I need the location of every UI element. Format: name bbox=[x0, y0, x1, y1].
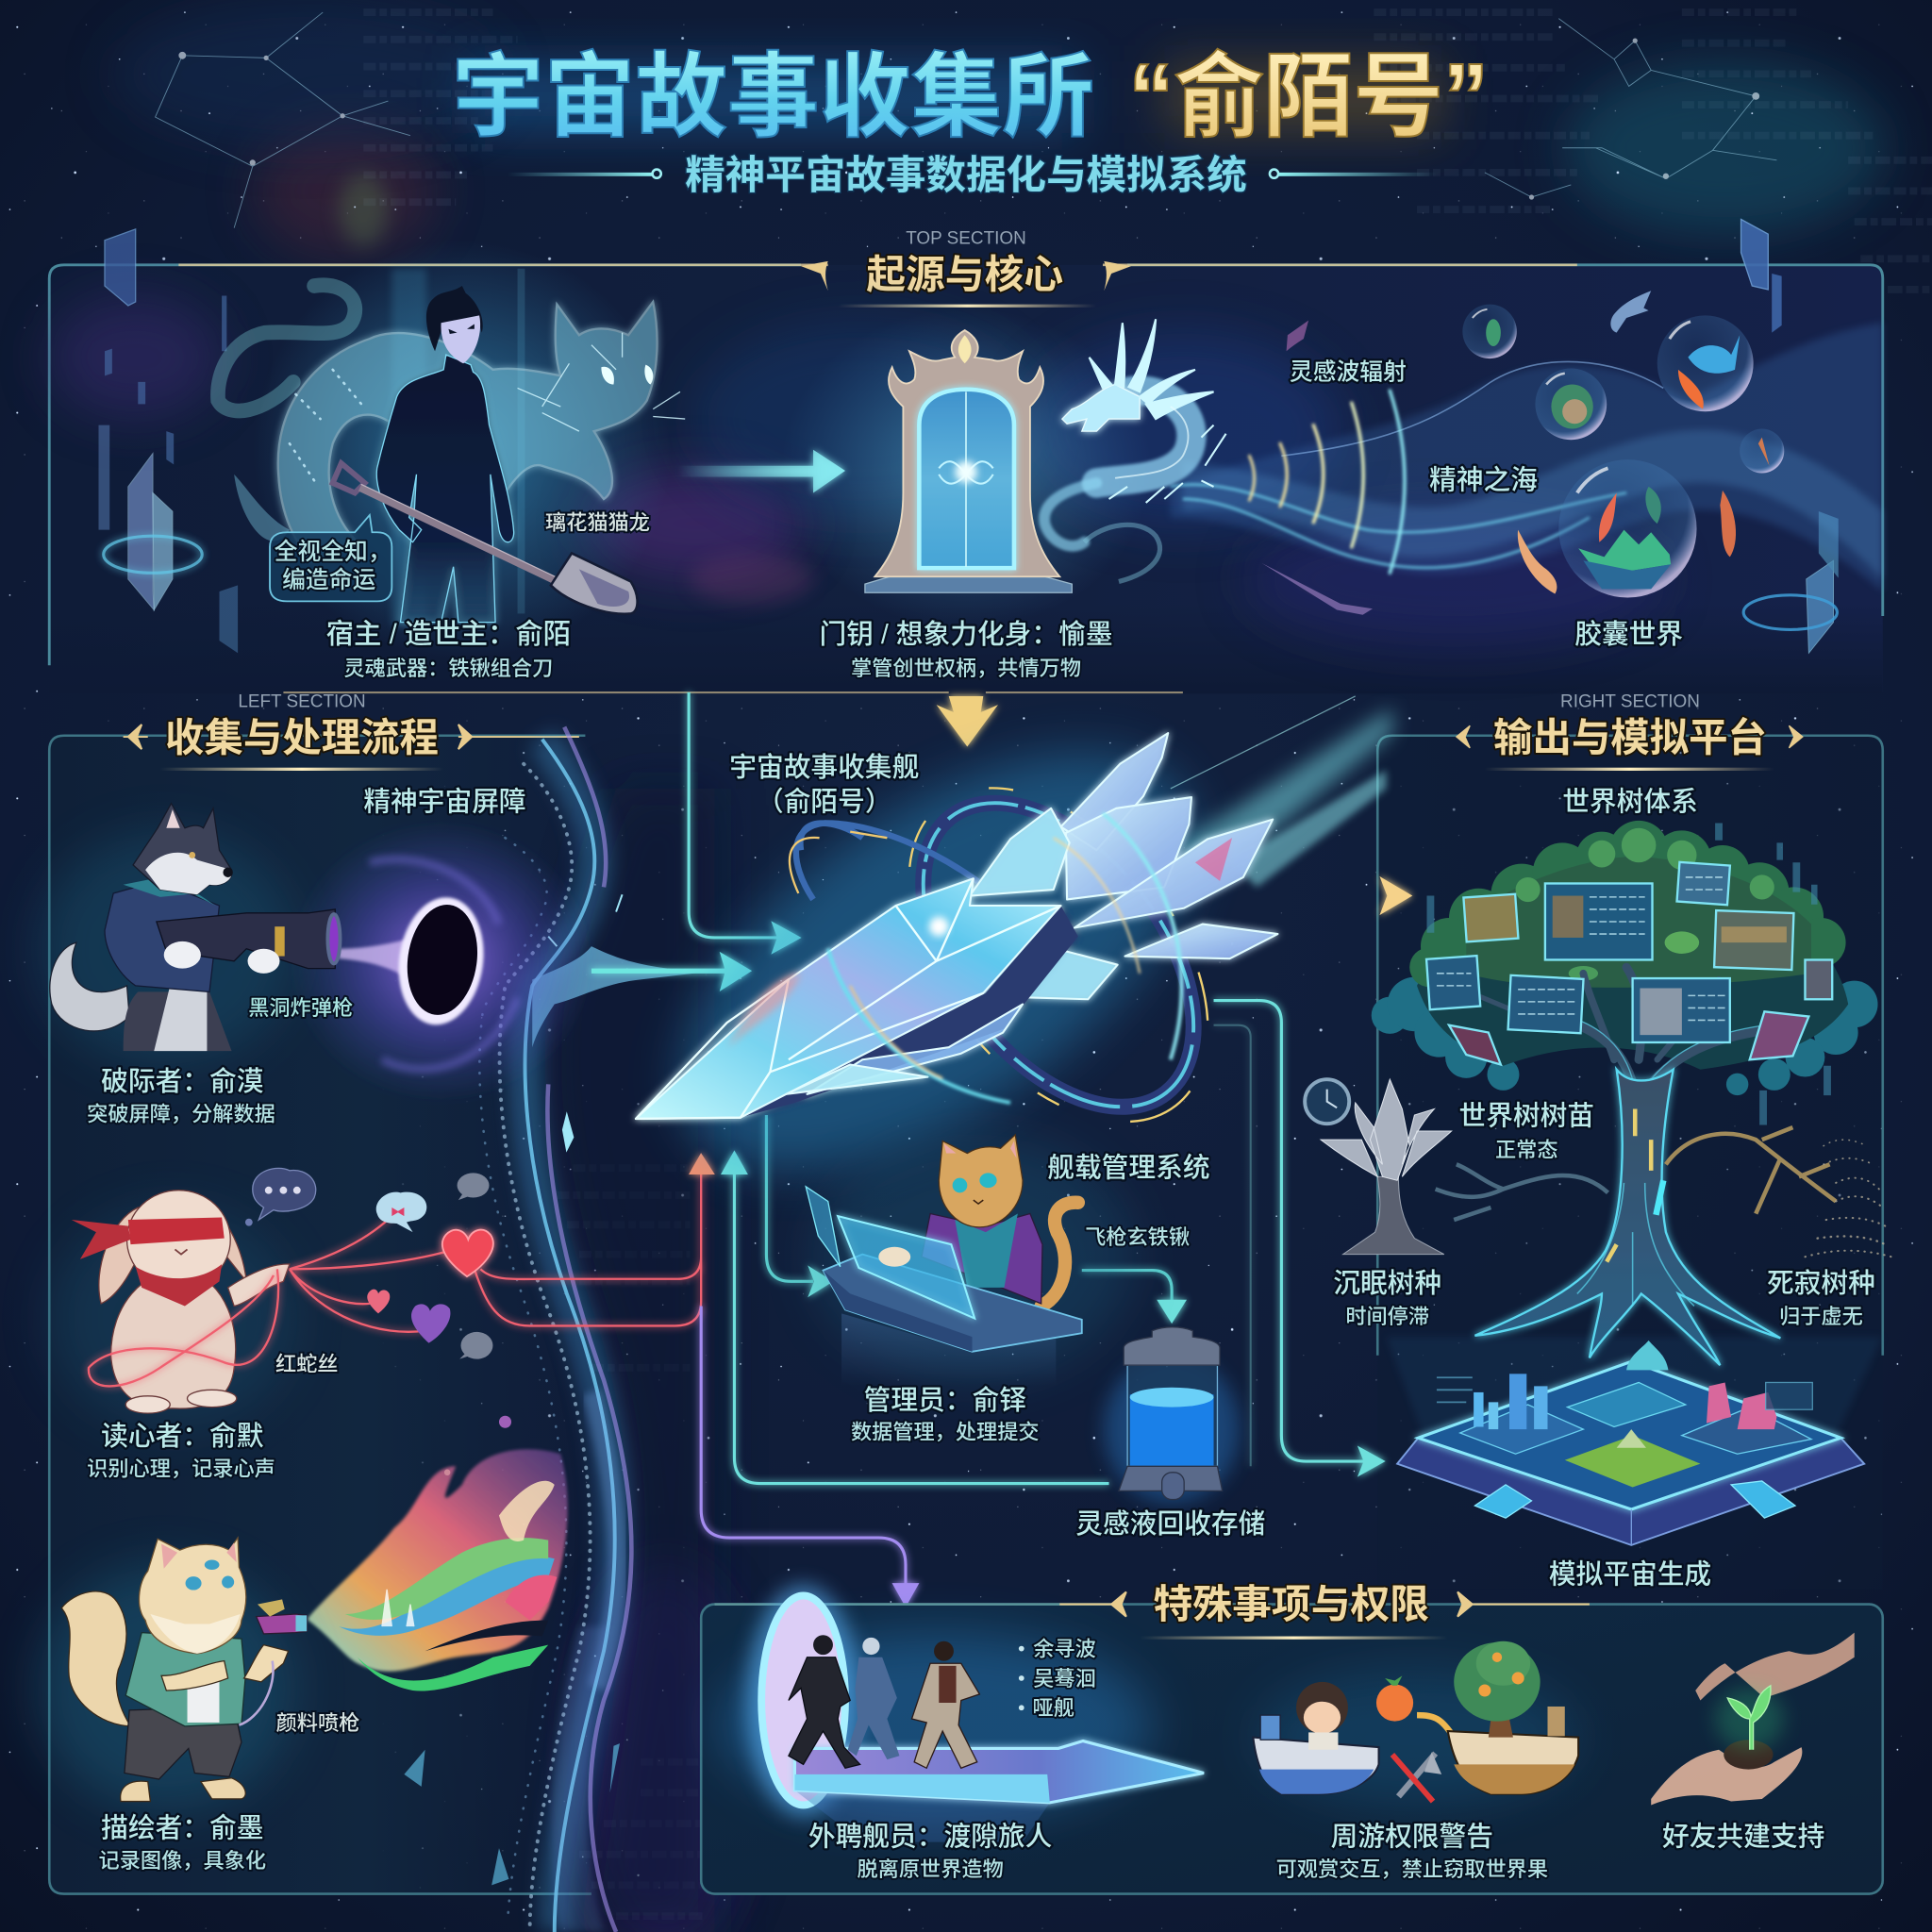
caption: outsourced crew: 脱离原世界造物 bbox=[857, 1857, 1004, 1881]
caption: travel warning bbox=[1276, 1823, 1548, 1881]
rainbow paint spray bbox=[308, 1392, 618, 1691]
section heading: right: 输出与模拟平台 bbox=[1493, 716, 1767, 760]
label: dormant seed bbox=[1333, 1269, 1441, 1328]
caption: key: 门钥 / 想象力化身：愉墨 bbox=[819, 620, 1113, 650]
title: “俞陌号” bbox=[1128, 44, 1489, 148]
label: barrier: 精神宇宙屏障 bbox=[363, 787, 526, 817]
inspiration wave arcs bbox=[1249, 391, 1405, 573]
label: sapling: 正常态 bbox=[1495, 1138, 1558, 1161]
connector: ship to world tree bbox=[1269, 880, 1409, 912]
caption: administrator: 管理员：俞铎 bbox=[864, 1386, 1026, 1416]
label: dormant seed: 时间停滞 bbox=[1345, 1305, 1429, 1328]
list: travelers names bbox=[1019, 1637, 1096, 1720]
section heading: left bbox=[124, 692, 579, 771]
crystal prisms bbox=[98, 219, 1839, 653]
label: iron shovel: 飞枪玄铁锹 bbox=[1085, 1225, 1190, 1249]
orbital rings bbox=[790, 732, 1268, 1177]
subtitle bbox=[508, 153, 1437, 197]
list: travelers names: 哑舰 bbox=[1033, 1696, 1074, 1720]
label: simulated universe: 模拟平宙生成 bbox=[1549, 1559, 1711, 1590]
caption: administrator: 数据管理，处理提交 bbox=[851, 1421, 1040, 1444]
central gold down arrow bbox=[283, 692, 1183, 747]
caption: painter: 记录图像，具象化 bbox=[99, 1849, 266, 1873]
title bbox=[452, 44, 1489, 148]
simulated universe platform bbox=[1397, 1341, 1864, 1545]
floating data blocks bbox=[1426, 823, 1831, 1124]
label: black hole gun: 黑洞炸弹枪 bbox=[248, 996, 353, 1020]
section heading: left: 收集与处理流程 bbox=[165, 716, 439, 760]
label: liquid storage: 灵感液回收存储 bbox=[1075, 1509, 1265, 1540]
caption: breaker: 突破屏障，分解数据 bbox=[87, 1103, 275, 1126]
caption: painter bbox=[99, 1813, 266, 1873]
connector: top to ship bbox=[689, 692, 798, 951]
left boat bbox=[1253, 1682, 1379, 1794]
admin: cat at holographic console bbox=[806, 1134, 1134, 1386]
label: dormant seed: 沉眠树种 bbox=[1333, 1269, 1441, 1299]
portal and gangway bbox=[721, 1585, 1204, 1842]
section heading: top: TOP SECTION bbox=[906, 229, 1026, 249]
connector: red thread up bbox=[691, 1156, 712, 1173]
caption: painter: 描绘者：俞墨 bbox=[101, 1813, 263, 1843]
connector: barrier to ship bbox=[591, 955, 749, 989]
panel: right section output platform bbox=[1305, 692, 1891, 1590]
section heading: top bbox=[801, 229, 1131, 308]
dead tree dust bbox=[1805, 1140, 1891, 1257]
hands with sprout bbox=[1651, 1633, 1855, 1805]
label: sea of mind: 精神之海 bbox=[1429, 466, 1538, 496]
arrow to gate bbox=[677, 450, 845, 492]
cat head bbox=[939, 1135, 1023, 1227]
light pillars and aura bbox=[253, 241, 672, 659]
flow connectors bbox=[591, 692, 1409, 1605]
label: dead seed: 归于虚无 bbox=[1779, 1305, 1863, 1328]
connector: storage back to ship bbox=[724, 1154, 1109, 1484]
label: friends support: 好友共建支持 bbox=[1662, 1823, 1824, 1853]
world tree canopy bbox=[1372, 821, 1878, 1095]
label: dead seed bbox=[1767, 1269, 1875, 1328]
ghost cat dragon bbox=[218, 285, 685, 560]
apple bbox=[1376, 1675, 1454, 1738]
boats with stolen fruit warning bbox=[1253, 1641, 1578, 1805]
husky character bbox=[37, 804, 340, 1066]
crossed shovel bbox=[1392, 1752, 1441, 1802]
data screens in tree bbox=[1426, 862, 1832, 1064]
hearts and speech clouds bbox=[245, 1168, 493, 1359]
caption: host bbox=[326, 619, 571, 680]
connector: to crew bbox=[701, 1306, 917, 1605]
world tree trunk and branches bbox=[1436, 967, 1836, 1365]
section heading: right bbox=[1457, 692, 1803, 771]
label: ship management: 舰载管理系统 bbox=[1047, 1153, 1210, 1183]
subtitle: 精神平宙故事数据化与模拟系统 bbox=[685, 153, 1247, 197]
nebula swaths bbox=[49, 295, 1663, 647]
caption: mind reader: 读心者：俞默 bbox=[101, 1422, 264, 1452]
title: 宇宙故事收集所 bbox=[452, 44, 1094, 148]
section heading: special: 特殊事项与权限 bbox=[1154, 1582, 1429, 1626]
caption: outsourced crew: 外聘舰员：渡隙旅人 bbox=[808, 1823, 1052, 1853]
label: cat dragon: 璃花猫猫龙 bbox=[545, 511, 650, 535]
cat body bbox=[922, 1214, 1042, 1304]
dormant crystal tree bbox=[1305, 1079, 1452, 1255]
section heading: top: 起源与核心 bbox=[866, 253, 1063, 297]
section heading: right: RIGHT SECTION bbox=[1560, 692, 1700, 712]
connector: ship to platform bbox=[1214, 1001, 1382, 1474]
speech bubble: omniscient: 全视全知， bbox=[275, 539, 391, 565]
panel: top section origin and core bbox=[49, 219, 1883, 693]
iron shovel blade weapon bbox=[333, 463, 638, 614]
barrier void and energy stream bbox=[404, 727, 715, 1932]
man silhouette with mask bbox=[376, 286, 514, 623]
panel: left section collection flow bbox=[37, 692, 715, 1932]
crew travelers bbox=[789, 1635, 979, 1768]
rabbit character bbox=[49, 1191, 295, 1429]
label: sapling: 世界树树苗 bbox=[1458, 1101, 1594, 1131]
purple shard bbox=[1261, 563, 1373, 615]
label: inspiration radiation: 灵感波辐射 bbox=[1290, 358, 1407, 385]
connector: admin to tank bbox=[1082, 1271, 1184, 1321]
label: story ship bbox=[729, 753, 919, 817]
label: story ship: 宇宙故事收集舰 bbox=[729, 753, 919, 783]
caption: breaker bbox=[87, 1067, 275, 1126]
capsule bubbles and fish bbox=[1287, 291, 1784, 597]
inspiration liquid tank bbox=[1104, 1327, 1240, 1503]
caption: mind reader: 识别心理，记录心声 bbox=[87, 1457, 275, 1481]
label: dead seed: 死寂树种 bbox=[1767, 1269, 1875, 1299]
caption: key: 掌管创世权柄，共情万物 bbox=[851, 657, 1081, 680]
caption: mind reader bbox=[87, 1422, 275, 1481]
speech bubble: omniscient: 编造命运 bbox=[282, 567, 376, 593]
caption: host: 灵魂武器：铁锹组合刀 bbox=[343, 657, 553, 680]
light cone bbox=[1386, 1337, 1883, 1436]
caption: key bbox=[819, 620, 1113, 680]
gate door bbox=[781, 308, 1151, 628]
dragon yu mo bbox=[1044, 319, 1226, 581]
caption: travel warning: 周游权限警告 bbox=[1331, 1823, 1493, 1853]
front ring arcs over hull bbox=[828, 813, 1182, 1103]
connector: ship to admin bbox=[766, 1115, 830, 1293]
holographic screen bbox=[838, 1216, 974, 1319]
caption: travel warning: 可观赏交互，禁止窃取世界果 bbox=[1276, 1857, 1548, 1881]
label: story ship: （俞陌号） bbox=[757, 787, 892, 817]
black hole bbox=[287, 820, 595, 1103]
caption: administrator bbox=[851, 1386, 1040, 1444]
panel: special items and permissions bbox=[701, 1582, 1883, 1894]
persian cat character bbox=[37, 1538, 307, 1811]
right boat with tree bbox=[1448, 1641, 1578, 1794]
crystal ship bbox=[609, 671, 1392, 1252]
label: sapling bbox=[1458, 1101, 1594, 1161]
label: world tree system: 世界树体系 bbox=[1562, 787, 1698, 817]
constellations bbox=[156, 12, 1776, 228]
ship trail beams bbox=[1171, 696, 1392, 887]
console desk bbox=[823, 1255, 1082, 1352]
label: red thread: 红蛇丝 bbox=[275, 1353, 339, 1376]
list: travelers names: 余寻波 bbox=[1033, 1637, 1096, 1660]
console stand bbox=[841, 1313, 1056, 1386]
caption: outsourced crew bbox=[808, 1823, 1052, 1881]
caption: breaker: 破际者：俞漠 bbox=[101, 1067, 263, 1097]
section heading: special bbox=[1059, 1582, 1590, 1640]
label: capsule world: 胶囊世界 bbox=[1574, 620, 1683, 650]
cat tail bbox=[1041, 1203, 1078, 1306]
speech bubble: omniscient bbox=[270, 515, 391, 601]
red threads and hearts bbox=[89, 1164, 701, 1386]
ship crystals bbox=[636, 733, 1277, 1119]
section heading: left: LEFT SECTION bbox=[238, 692, 366, 712]
sea of mind waves bbox=[1171, 323, 1883, 591]
caption: host: 宿主 / 造世主：俞陌 bbox=[326, 619, 571, 650]
label: paint spray gun: 颜料喷枪 bbox=[276, 1711, 359, 1735]
list: travelers names: 吴蓦洄 bbox=[1033, 1667, 1096, 1690]
